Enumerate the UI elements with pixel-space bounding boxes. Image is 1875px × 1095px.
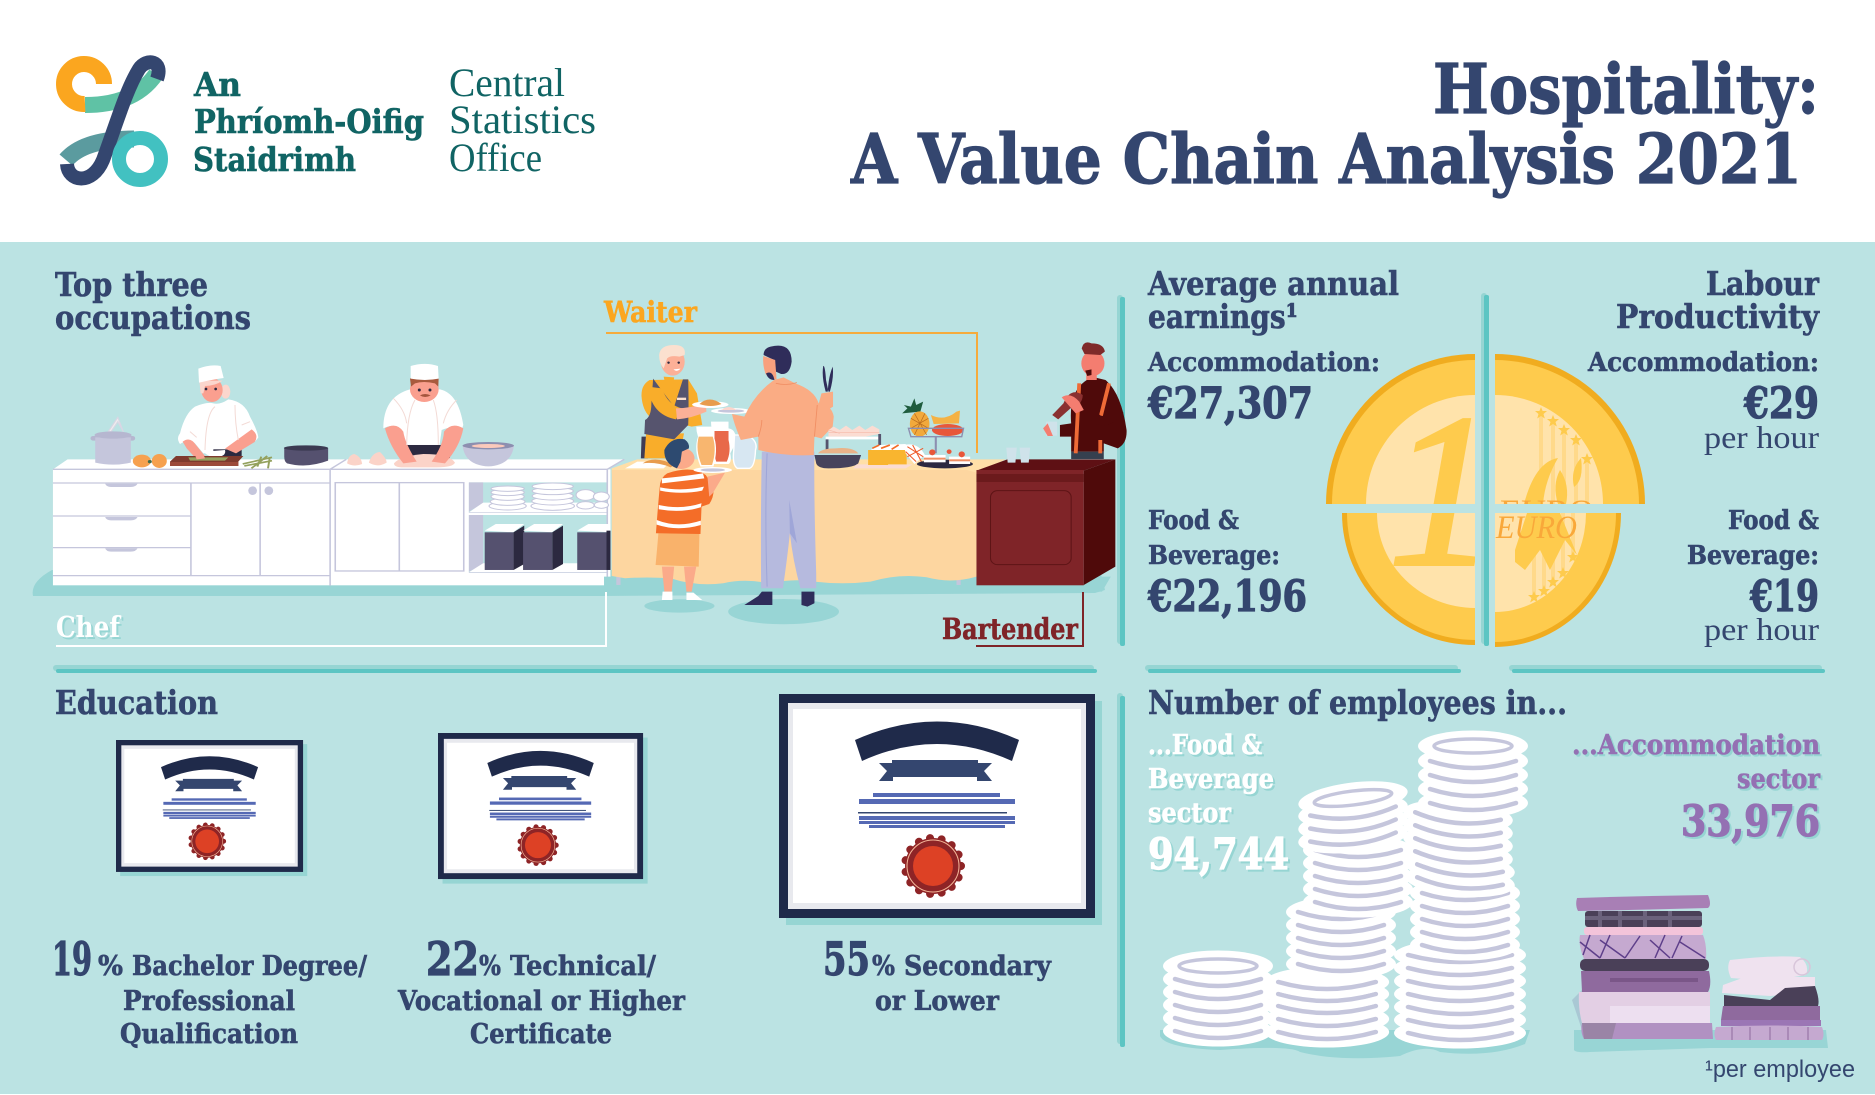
icon: certificate 19% <box>116 740 307 876</box>
trousers <box>761 452 816 588</box>
title: Hospitality: <box>1433 50 1819 130</box>
asparagus <box>243 456 272 468</box>
stat: accommodation productivity: €29 <box>1743 379 1819 429</box>
storage boxes <box>485 524 610 570</box>
text: food and beverage sector: sector <box>1148 798 1232 829</box>
text: accommodation sector: sector <box>1737 764 1821 795</box>
illustration: kitchen counter <box>53 417 624 586</box>
stat: accommodation productivity <box>1587 347 1819 455</box>
heading: top three occupations: Top three <box>55 265 208 304</box>
peppers <box>133 454 167 468</box>
logo text: Irish name: Phríomh-Oifig <box>194 102 424 141</box>
dividers <box>53 293 1825 1047</box>
bar counter <box>976 459 1115 585</box>
label: Waiter: Waiter <box>603 295 698 329</box>
label: Bartender: Bartender <box>942 612 1079 646</box>
pot <box>90 417 135 465</box>
heading: education: Education <box>55 683 218 722</box>
small towel stack <box>1714 956 1824 1040</box>
text: 55% secondary: or Lower <box>875 986 1000 1017</box>
logo text: Irish name: An <box>193 65 241 104</box>
second plate and man <box>711 346 834 607</box>
stat: food and beverage earnings <box>1147 505 1307 622</box>
stat: food and beverage productivity: per hour <box>1704 611 1819 647</box>
shelves <box>469 482 606 572</box>
heading: earnings: Average annual <box>1147 264 1399 303</box>
heading: productivity: Labour <box>1706 264 1820 303</box>
stack F <box>1410 878 1520 960</box>
coin top right: EURO <box>1500 494 1594 530</box>
text: 22% technical <box>397 932 686 1050</box>
plates on shelf <box>489 483 609 510</box>
stat: food and beverage earnings: Beverage: <box>1148 540 1280 571</box>
text: 55% secondary: 55 <box>823 932 870 986</box>
title <box>850 50 1819 200</box>
kid <box>656 439 732 600</box>
coin bottom right: EURO <box>1495 510 1577 546</box>
stat: accommodation earnings: Accommodation: <box>1147 347 1380 378</box>
text: 19% bachelor degree: 19 <box>52 932 92 986</box>
stack B <box>1265 966 1389 1048</box>
logo text: English name: Office <box>449 135 542 180</box>
text: 19% bachelor degree <box>52 932 367 1050</box>
text: food and beverage sector: ...Food & <box>1148 730 1262 761</box>
coin bottom right <box>1495 510 1621 647</box>
heading: earnings: earnings¹ <box>1148 297 1298 336</box>
text: food and beverage sector <box>1148 730 1289 880</box>
stat: food and beverage productivity: €19 <box>1749 572 1819 622</box>
text: accommodation sector <box>1572 730 1821 847</box>
bowl <box>463 442 514 466</box>
coin bottom left: 1 <box>1388 371 1497 612</box>
cups on bar <box>1006 448 1030 463</box>
heading: productivity: Productivity <box>1616 297 1820 336</box>
text: 55% secondary: Secondary <box>904 951 1052 982</box>
label: Chef <box>56 592 606 646</box>
text: food and beverage sector: Beverage <box>1148 764 1274 795</box>
buffet table <box>616 573 621 585</box>
text: 19% bachelor degree: Bachelor Degree/ <box>132 951 367 982</box>
illustration: plate stacks <box>1160 730 1530 1058</box>
text: 22% technical: Vocational or Higher <box>397 986 686 1017</box>
coin top left: 1 <box>1388 371 1497 612</box>
stat: accommodation earnings: €27,307 <box>1147 379 1313 429</box>
stack E <box>1394 940 1526 1048</box>
yellow cakes <box>853 444 925 468</box>
shadow ground <box>604 577 1111 593</box>
coin top right <box>1495 354 1645 504</box>
bartender <box>1043 342 1127 459</box>
logo text: English name: Statistics <box>449 97 596 142</box>
stack G <box>1402 796 1516 901</box>
panel: average annual earnings <box>1147 264 1399 622</box>
illustration: buffet and bar <box>604 342 1127 624</box>
icon: logo knot <box>64 62 161 180</box>
coin illustration <box>1326 354 1645 647</box>
dough balls <box>347 452 387 466</box>
text: 19% bachelor degree: % <box>98 951 123 982</box>
stat: accommodation productivity: per hour <box>1704 419 1819 455</box>
logo: CSO <box>64 60 596 180</box>
panel: labour productivity <box>1587 264 1820 647</box>
dark pan <box>284 445 328 465</box>
text: 22% technical: Certificate <box>470 1019 612 1050</box>
large towel stack <box>1572 895 1713 1039</box>
logo text: English name: Central <box>449 60 565 105</box>
heading: productivity <box>1616 264 1820 336</box>
text: accommodation sector: 33,976 <box>1681 797 1820 847</box>
croissants on table <box>625 460 674 468</box>
illustration: chef right <box>383 364 463 467</box>
text: 22% technical: Technical/ <box>510 951 656 982</box>
logo text: Irish name: Staidrimh <box>193 140 356 179</box>
illustration: folded towels <box>1572 895 1828 1052</box>
waiter <box>641 345 729 458</box>
stat: food and beverage productivity <box>1687 505 1819 647</box>
text: 19% bachelor degree: Qualification <box>120 1019 298 1050</box>
footnote: ¹per employee <box>1705 1056 1855 1083</box>
stat: food and beverage earnings: Food & <box>1148 505 1239 536</box>
stack D <box>1297 776 1413 918</box>
text: 19% bachelor degree: Professional <box>123 986 295 1017</box>
label: Chef: Chef <box>56 610 122 644</box>
logo text: Irish name <box>193 65 424 179</box>
text: 22% technical: % <box>479 951 501 982</box>
text: 22% technical: 22 <box>426 932 479 986</box>
heading: earnings <box>1147 264 1399 336</box>
logo text: English name <box>449 60 596 180</box>
floor shadow <box>33 570 1105 596</box>
coin top left <box>1326 354 1475 504</box>
stat: food and beverage productivity: Beverage: <box>1687 540 1819 571</box>
illustration: chef left <box>170 365 258 466</box>
label: Bartender <box>942 592 1083 646</box>
stat: food and beverage productivity: Food & <box>1728 505 1819 536</box>
fruit stand <box>902 398 973 468</box>
stat: food and beverage earnings: €22,196 <box>1147 572 1307 622</box>
text: accommodation sector: ...Accommodation <box>1572 730 1820 761</box>
text: 55% secondary: % <box>872 951 895 982</box>
stat: accommodation productivity: Accommodation: <box>1587 347 1819 378</box>
heading: top three occupations <box>55 265 251 337</box>
text: 55% secondary <box>823 932 1052 1017</box>
heading: number of employees: Number of employees in... <box>1148 683 1567 722</box>
stack C <box>1286 896 1396 980</box>
label: Waiter <box>603 295 977 453</box>
cake rack <box>814 426 881 468</box>
icon: certificate 22% <box>438 733 648 884</box>
coin bottom left <box>1342 513 1475 645</box>
icon: certificate 55% <box>779 694 1102 925</box>
jugs <box>696 422 756 468</box>
background panel <box>0 242 1875 1094</box>
stack H <box>1418 730 1528 818</box>
heading: top three occupations: occupations <box>55 298 251 337</box>
text: food and beverage sector: 94,744 <box>1148 830 1289 880</box>
stat: accommodation earnings <box>1147 347 1380 429</box>
stack A <box>1163 950 1273 1046</box>
